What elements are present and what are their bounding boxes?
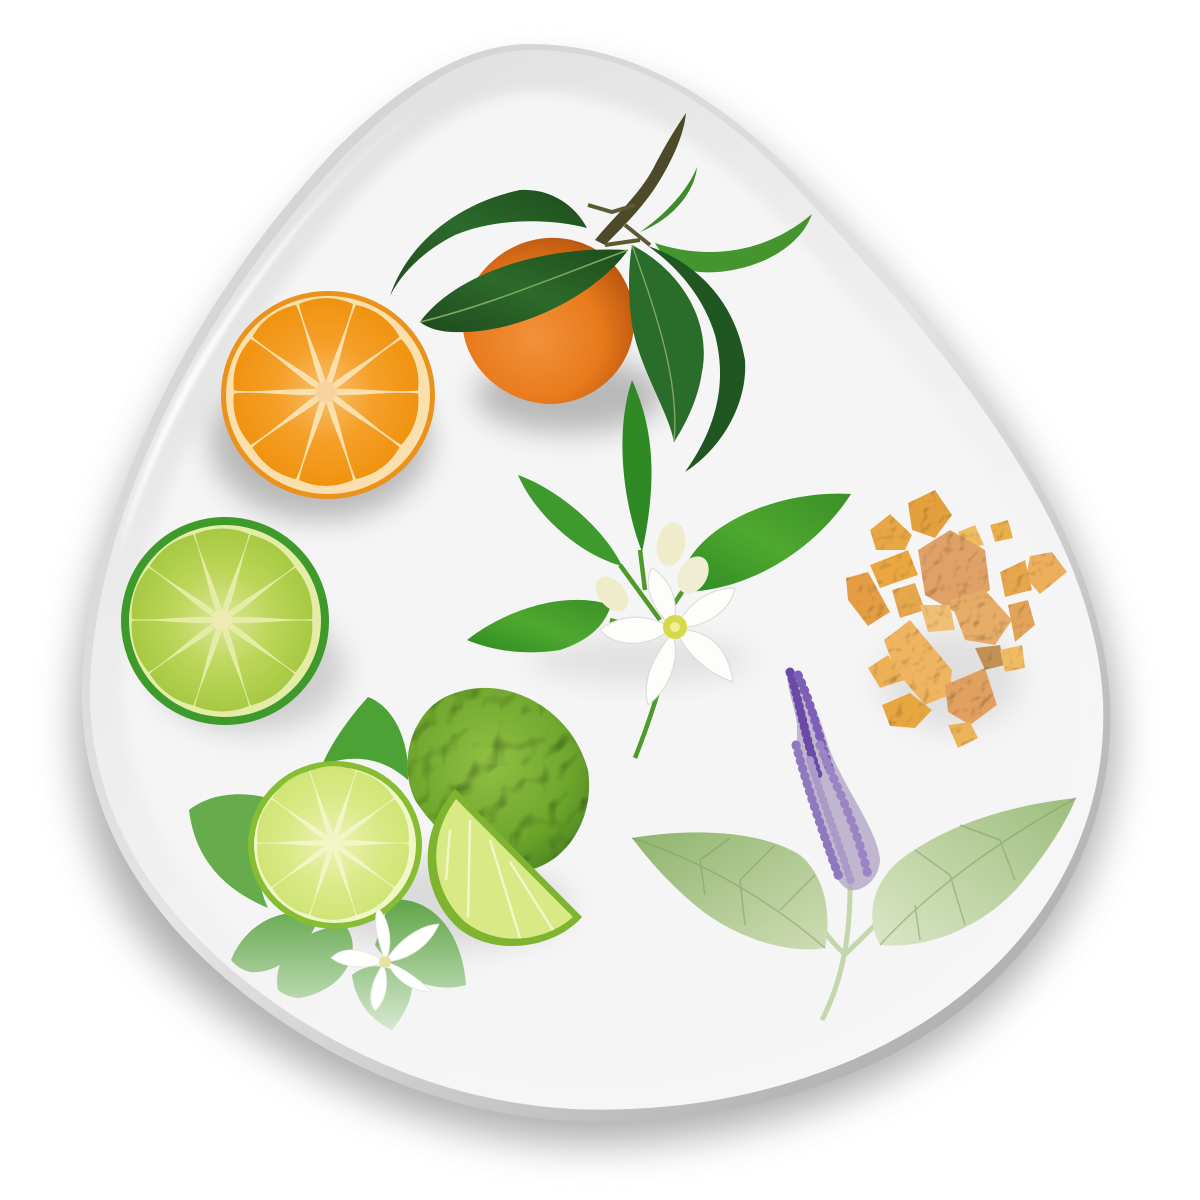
wedge flesh — [436, 799, 573, 939]
leaf right — [682, 494, 851, 592]
group: whole orange with branch — [390, 113, 812, 472]
leaf: right tall — [629, 245, 704, 442]
stems — [610, 550, 690, 758]
leaf right — [872, 798, 1076, 946]
leaf: top left — [390, 190, 587, 296]
midrib right — [632, 245, 675, 442]
twig — [588, 205, 650, 245]
plate rim highlight — [118, 112, 418, 560]
leaf lower right — [375, 900, 466, 988]
leaf left — [189, 794, 275, 908]
plate inner bowl — [124, 92, 1076, 1085]
blossom centre — [663, 615, 687, 639]
leaf: far right drooping — [648, 246, 745, 472]
group: resin pieces — [846, 490, 1067, 748]
plate surface — [90, 50, 1103, 1110]
midrib — [420, 250, 628, 322]
wedge membranes — [446, 820, 553, 938]
group: bergamot fruit and leaves — [189, 688, 589, 1030]
buds — [653, 520, 689, 568]
leaf bottom — [352, 966, 412, 1030]
leaf veins — [632, 798, 1076, 948]
small white blossom — [331, 908, 439, 1011]
wedge rind — [428, 789, 582, 946]
cut bergamot segments — [253, 766, 413, 920]
cut bergamot pith — [254, 767, 416, 923]
flower spike base — [788, 672, 880, 890]
plate drop shadow — [77, 72, 1117, 1144]
leaf: right pointing — [655, 214, 812, 272]
rind — [121, 517, 329, 725]
small leaf on branch — [640, 167, 697, 232]
whole bergamot — [407, 688, 589, 870]
leaf top — [322, 697, 408, 780]
flower spike florets — [790, 672, 868, 885]
orange fruit — [463, 238, 634, 404]
leaf left lower — [467, 600, 611, 652]
stem — [820, 885, 875, 1020]
group: orange blossom sprig — [467, 380, 851, 758]
pith — [226, 296, 430, 494]
group: halved orange — [221, 291, 435, 499]
segments — [228, 298, 424, 486]
leaf lower middle — [277, 925, 353, 998]
pith — [129, 525, 321, 717]
core — [315, 381, 337, 403]
leaf lower left — [231, 912, 320, 972]
cut bergamot rind — [248, 761, 422, 929]
petals — [600, 568, 735, 705]
blossom centre — [379, 956, 391, 968]
branch — [595, 113, 686, 245]
group: cast shadows — [155, 357, 1020, 950]
group: bergamot slice — [121, 517, 329, 725]
leaf left narrow — [518, 475, 622, 566]
leaf: large centre — [420, 250, 628, 332]
group: patchouli — [632, 672, 1076, 1020]
leaf top — [622, 380, 651, 552]
rind — [221, 291, 435, 499]
plate rim — [82, 44, 1110, 1122]
core — [212, 610, 232, 630]
segments — [127, 528, 317, 712]
leaf left — [632, 832, 827, 949]
